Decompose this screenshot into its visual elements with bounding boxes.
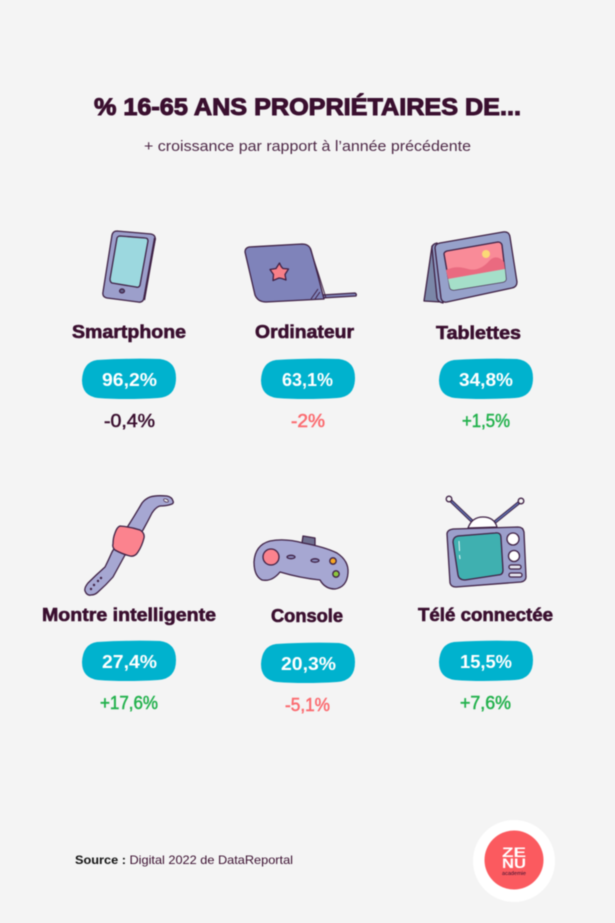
value pill: 15,5% — [439, 641, 533, 681]
value pill: 63,1% — [261, 359, 355, 399]
source: Source : Digital 2022 de DataReportal — [75, 853, 293, 867]
value pill: 63,1%: 63,1% — [282, 370, 333, 390]
title: % 16-65 ANS PROPRIÉTAIRES DE... — [94, 93, 521, 121]
logo: ZENU: NU — [502, 855, 526, 871]
icon: laptop — [245, 244, 356, 302]
logo: ZENU — [473, 820, 555, 902]
label: Console: Console — [271, 606, 343, 626]
panel: console — [254, 536, 355, 715]
icon: television — [446, 496, 526, 587]
icon: game controller — [254, 536, 348, 589]
value pill: 20,3%: 20,3% — [281, 654, 336, 674]
value pill: 20,3% — [261, 643, 355, 683]
value pill: 27,4% — [82, 641, 176, 681]
panel: montre intelligente — [42, 496, 216, 713]
label: Télé connectée: Télé connectée — [418, 605, 553, 625]
label: Montre intelligente: Montre intelligente — [42, 605, 216, 625]
panel: ordinateur — [245, 244, 356, 431]
value pill: 34,8% — [439, 359, 533, 399]
change: +17,6%: +17,6% — [100, 693, 158, 713]
icon: smartwatch — [85, 496, 173, 595]
label: Smartphone: Smartphone — [72, 322, 186, 342]
logo: ZENU: academie — [502, 871, 526, 877]
panel: télé connectée — [418, 496, 553, 713]
panel: tablettes — [424, 232, 533, 431]
label: Tablettes: Tablettes — [436, 323, 521, 343]
icon: tablet — [424, 232, 517, 303]
value pill: 96,2% — [82, 359, 176, 399]
change: -5,1%: -5,1% — [285, 695, 330, 715]
value pill: 27,4%: 27,4% — [102, 652, 157, 672]
value pill: 96,2%: 96,2% — [102, 370, 157, 390]
logo: ZENU: ZE — [502, 844, 526, 860]
icon: smartphone — [103, 231, 155, 302]
change: -0,4%: -0,4% — [104, 411, 155, 431]
label: Ordinateur: Ordinateur — [255, 322, 354, 342]
panel: smartphone — [72, 231, 186, 431]
change: -2%: -2% — [291, 411, 325, 431]
value pill: 15,5%: 15,5% — [460, 652, 512, 672]
change: +7,6%: +7,6% — [460, 693, 511, 713]
change: +1,5%: +1,5% — [462, 411, 510, 431]
value pill: 34,8%: 34,8% — [459, 370, 513, 390]
subtitle: + croissance par rapport à l’année précédente — [144, 138, 471, 155]
